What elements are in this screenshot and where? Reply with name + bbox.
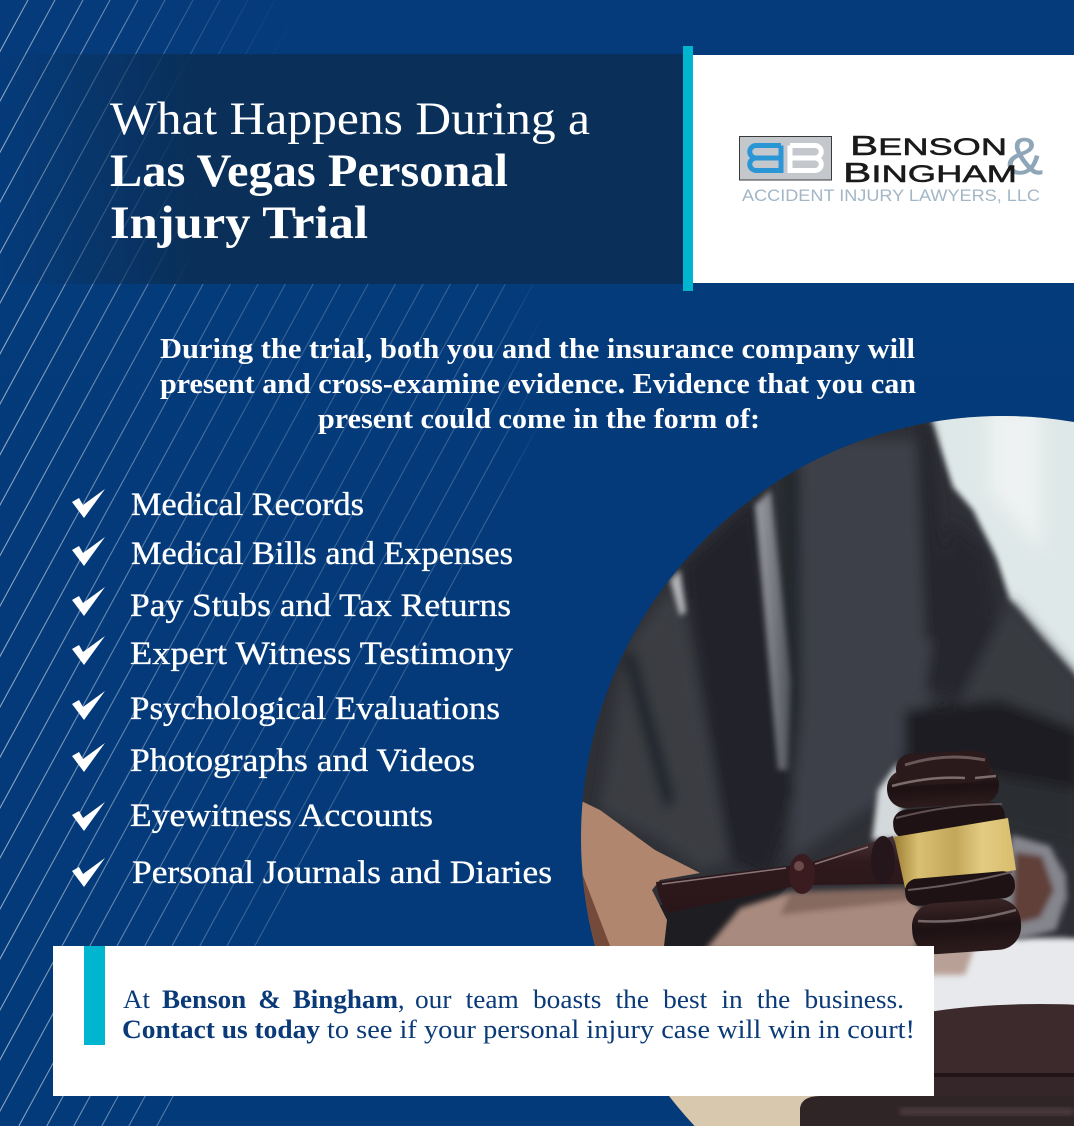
title: What Happens During a	[110, 93, 590, 145]
item: Medical Records: Medical Records	[131, 487, 364, 523]
window background	[925, 400, 1074, 682]
call to action text: ,	[398, 985, 404, 1014]
intro text: During the trial, both you and the insurance company will	[160, 334, 915, 365]
intro text: present and cross-examine evidence. Evidence that you can	[160, 369, 916, 400]
dark lap below handle	[660, 888, 787, 946]
call to action text: to see if your personal injury case will win in court!	[327, 1015, 915, 1044]
panel: logo box	[683, 46, 1074, 291]
title: Injury Trial	[110, 197, 368, 249]
photo: judge with gavel	[570, 400, 1074, 1126]
item: Photographs and Videos: Photographs and Videos	[130, 743, 475, 779]
item: Psychological Evaluations: Psychological Evaluations	[130, 691, 500, 727]
title	[110, 93, 590, 249]
gavel handle	[656, 836, 905, 913]
checklist	[72, 487, 552, 891]
logo	[740, 128, 1043, 205]
call to action text: At	[123, 985, 151, 1014]
item: Personal Journals and Diaries: Personal Journals and Diaries	[132, 855, 552, 891]
shirt gap behind gavel	[872, 762, 905, 840]
logo: B INGHAM	[843, 157, 1017, 188]
diagonal line pattern	[0, 0, 770, 1126]
suit shading	[600, 420, 1074, 880]
panel: call to action	[53, 946, 934, 1096]
top fade	[120, 0, 720, 56]
call to action text: our team boasts the best in the business.	[415, 985, 904, 1014]
panel: title band	[0, 54, 683, 284]
intro text: present could come in the form of:	[318, 404, 760, 435]
call to action text: Contact us today	[122, 1015, 320, 1044]
table and paper	[669, 1096, 820, 1126]
call to action text	[122, 985, 915, 1044]
item: Pay Stubs and Tax Returns: Pay Stubs and Tax Returns	[130, 588, 511, 624]
intro text	[160, 334, 916, 435]
item: Medical Bills and Expenses: Medical Bills and Expenses	[131, 536, 513, 572]
logo: ACCIDENT INJURY LAWYERS, LLC	[742, 186, 1040, 205]
call to action text: Benson & Bingham	[162, 985, 398, 1014]
logo: B ENSON	[850, 130, 1007, 161]
item: Eyewitness Accounts: Eyewitness Accounts	[130, 798, 433, 834]
sound block	[800, 1004, 1074, 1126]
shirt strips	[670, 490, 791, 770]
title: Las Vegas Personal	[110, 145, 508, 197]
gavel head	[886, 750, 1023, 956]
hands and cuff	[705, 835, 1074, 975]
item: Expert Witness Testimony: Expert Witness Testimony	[130, 636, 514, 672]
logo: &	[1006, 128, 1043, 186]
